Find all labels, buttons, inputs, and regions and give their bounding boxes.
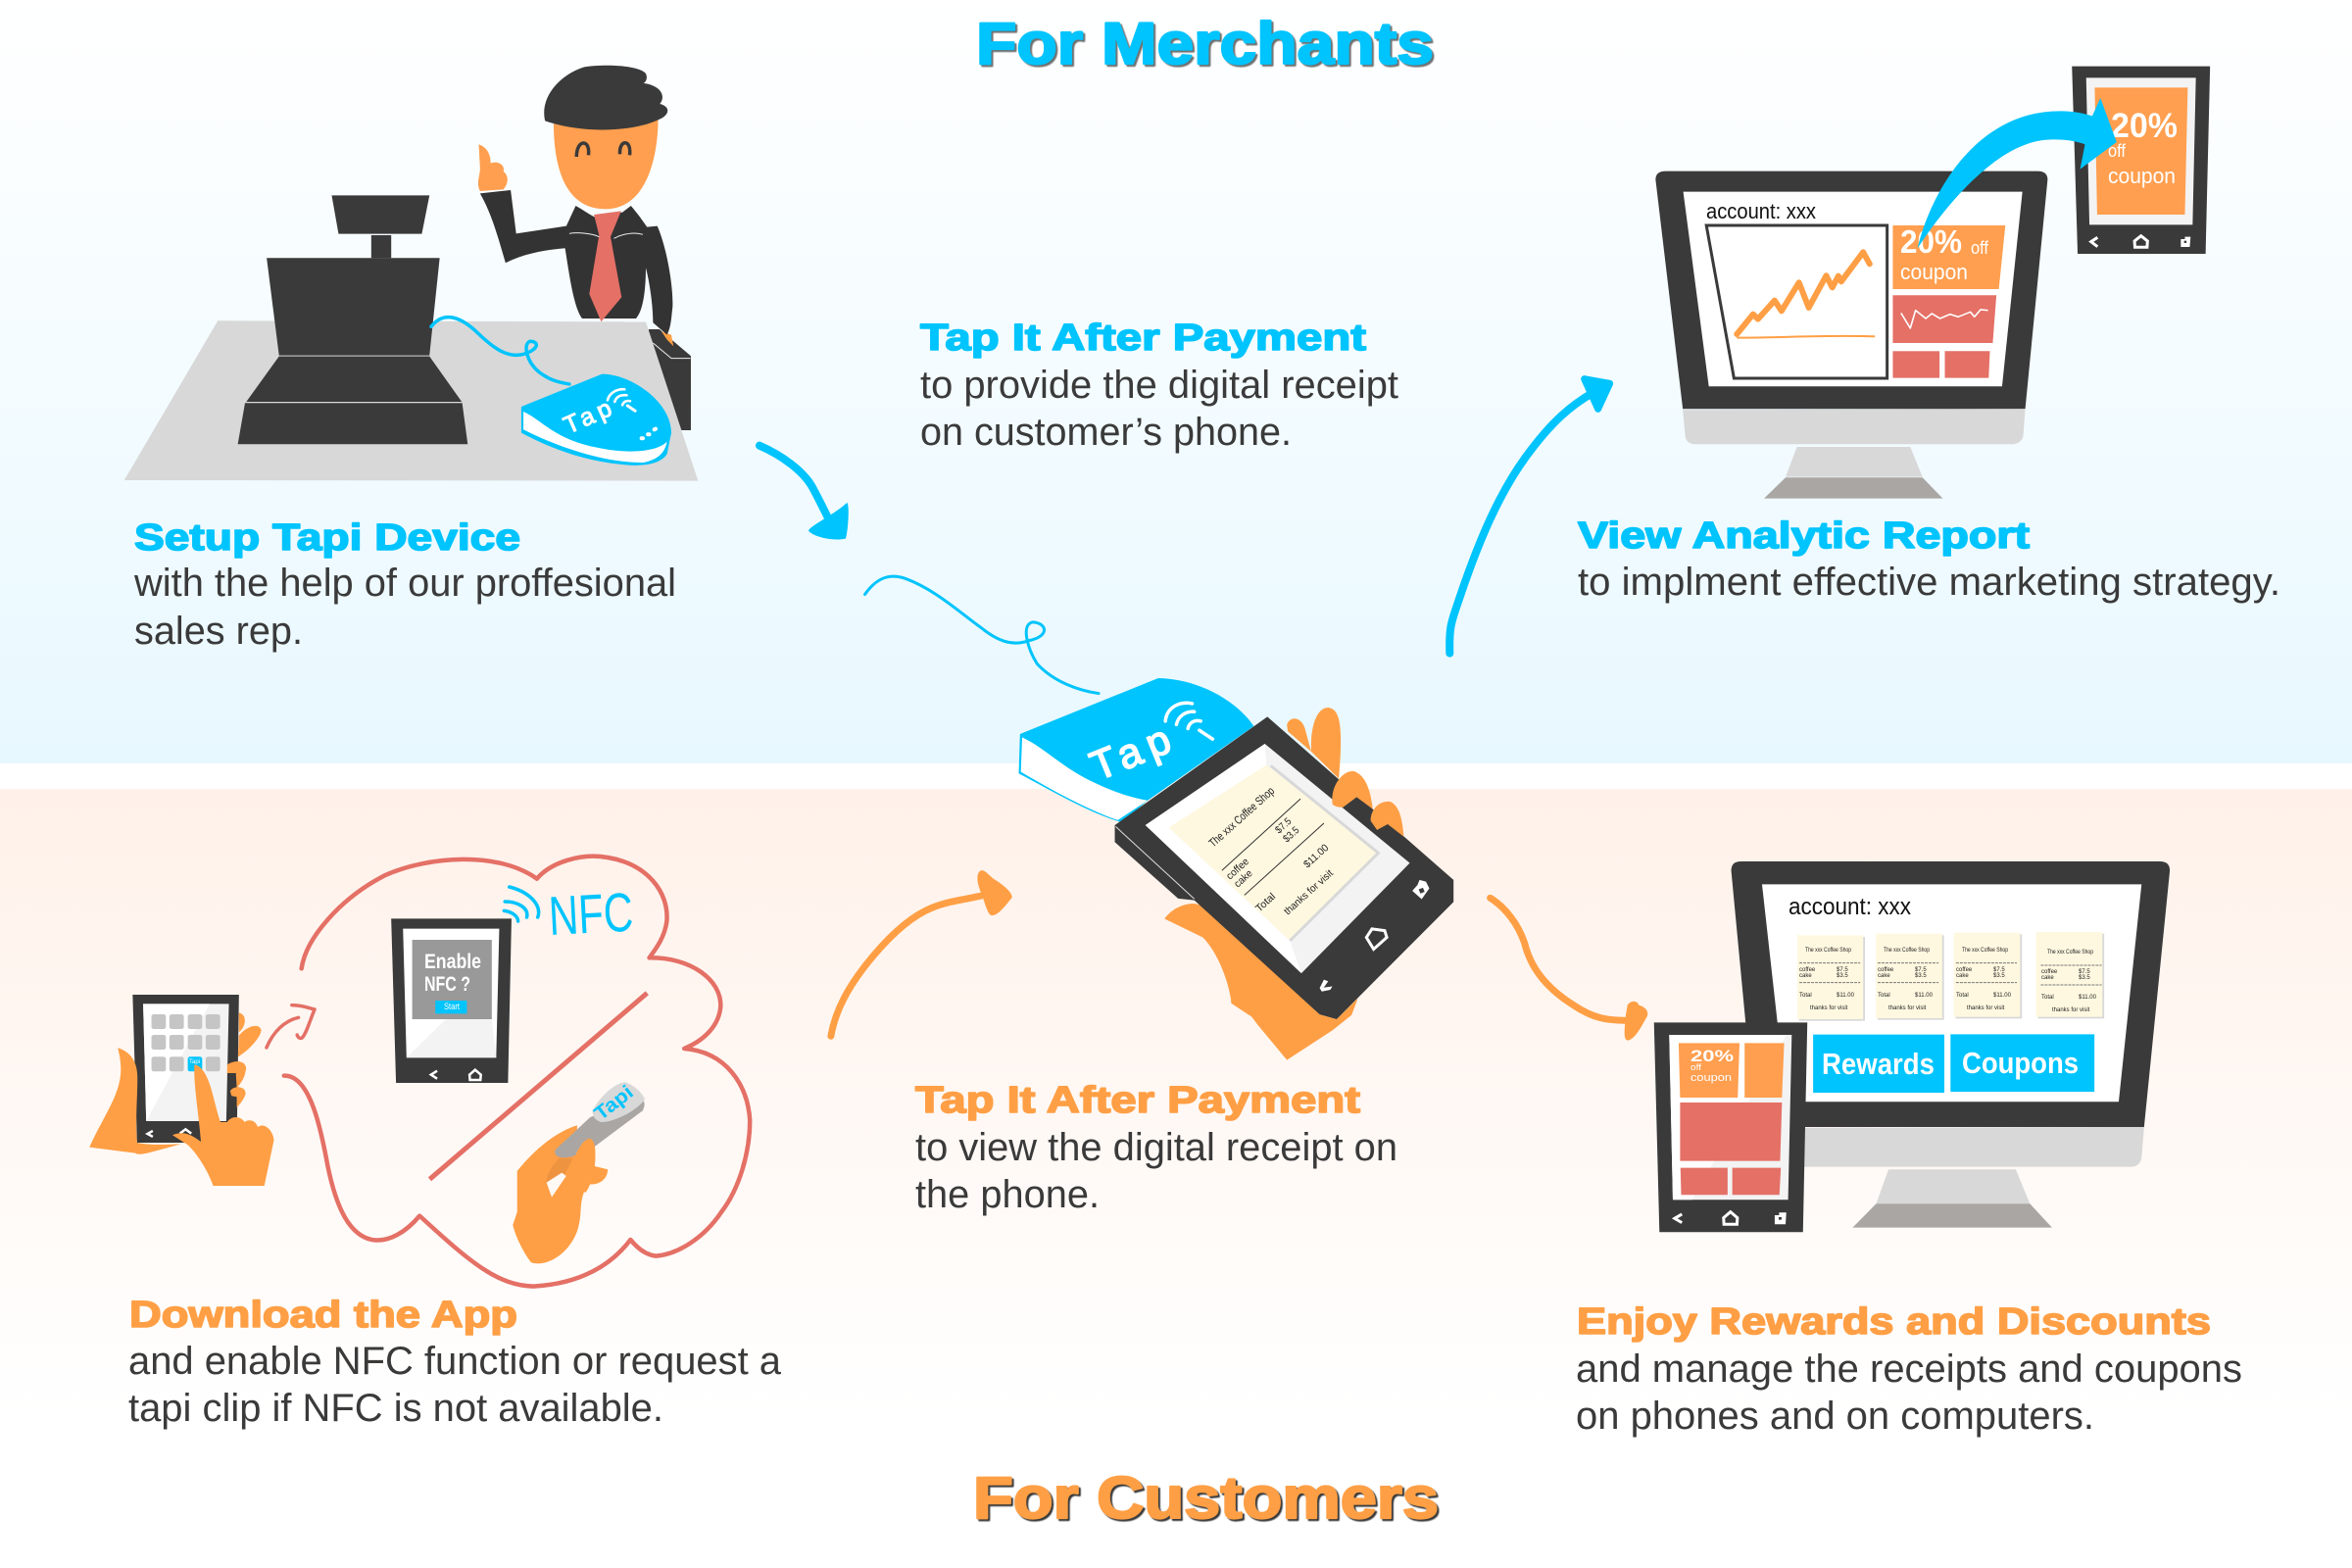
rewards monitor stand <box>1852 1169 2052 1228</box>
NFC phone prompt text: Start <box>444 1002 460 1012</box>
text block: Enjoy Rewards and Discounts: and manage the receipts and coupons <box>1576 1348 2242 1391</box>
phone screen <box>1146 744 1410 973</box>
text block: Tap It After Payment (merchant): on customer’s phone. <box>920 411 1292 454</box>
rewards monitor chin <box>1757 1127 2144 1167</box>
monitor coupon text <box>1900 223 1989 284</box>
Coupons label: Coupons <box>1962 1046 2079 1080</box>
rewards phone coupon text: 20% <box>1690 1047 1734 1065</box>
rewards monitor frame <box>1732 861 2170 1127</box>
center device cable <box>865 576 1099 694</box>
app icon label: Tapi <box>189 1059 200 1065</box>
text block: Download the App: Download the App <box>129 1295 517 1336</box>
receipt text <box>1206 784 1336 917</box>
receipt card text 1: The xxx Coffee Shop <box>1805 948 1852 954</box>
phone nav icons <box>2091 236 2190 247</box>
phone coupon text: coupon <box>2108 164 2176 188</box>
receipt card text 3 <box>1956 948 2012 1011</box>
NFC phone <box>391 918 512 1083</box>
NFC phone prompt text <box>424 951 481 1012</box>
hand holding tapi clip <box>513 1125 608 1263</box>
receipt card text 3: coffee <box>1956 967 1973 973</box>
receipt card text 2: Total <box>1878 993 1890 999</box>
app phone <box>132 995 239 1143</box>
divider slash <box>429 993 647 1179</box>
small red tiles <box>1892 351 1990 378</box>
thought cloud <box>284 857 750 1287</box>
text block: View Analytic Report: View Analytic Report <box>1578 515 2030 557</box>
receipt card text 4: $3.5 <box>2079 975 2090 981</box>
receipt card text 4: cake <box>2041 975 2054 981</box>
text block: Enjoy Rewards and Discounts <box>1576 1301 2242 1438</box>
receipt card text 2: thanks for visit <box>1888 1005 1927 1011</box>
receipt card text 2: The xxx Coffee Shop <box>1884 948 1931 954</box>
arrow into cloud <box>267 1005 315 1048</box>
text block: View Analytic Report <box>1578 515 2280 604</box>
device label: Tapi: Tapi <box>560 388 630 439</box>
receipt text: $3.5 <box>1281 824 1301 845</box>
monitor screen <box>1684 192 2023 386</box>
receipt card text 3: $3.5 <box>1993 973 2005 979</box>
receipt card text 1: Total <box>1799 993 1812 999</box>
background: merchants section <box>0 0 2352 763</box>
Coupons button <box>1950 1034 2094 1092</box>
illustration: center Tapi device and phone with receipt <box>865 576 1453 1060</box>
monitor stand <box>1764 447 1942 499</box>
title: For Merchants: For Merchants <box>976 11 1434 76</box>
center device body <box>1019 678 1253 822</box>
Rewards label: Rewards <box>1822 1047 1935 1081</box>
receipt card text 2: $3.5 <box>1915 973 1927 979</box>
receipt card text 3: $11.00 <box>1993 993 2012 999</box>
text block: Tap It After Payment (customer): the phone. <box>915 1173 1100 1216</box>
rewards phone coupon text: coupon <box>1690 1072 1732 1084</box>
receipt text: $11.00 <box>1301 842 1331 870</box>
receipt card text 1: $11.00 <box>1837 993 1855 999</box>
phone coupon text: off <box>2108 141 2127 161</box>
phone nav icons <box>1320 880 1429 992</box>
briefcase <box>648 329 691 430</box>
illustration: merchant at cash register with Tapi device <box>124 66 698 481</box>
receipt card text 1 <box>1799 948 1855 1011</box>
phone body <box>1115 716 1453 1019</box>
receipt card text 1: coffee <box>1799 967 1816 973</box>
receipt card text 2: $7.5 <box>1915 967 1927 973</box>
receipt card text 1: $7.5 <box>1837 967 1848 973</box>
receipt text: Total <box>1253 891 1278 914</box>
receipt card text 4 <box>2041 950 2097 1013</box>
text block: Tap It After Payment (customer): Tap It After Payment <box>915 1080 1360 1121</box>
NFC signal arcs <box>504 887 539 921</box>
monitor coupon text: off <box>1971 238 1989 258</box>
receipt card text 1: thanks for visit <box>1810 1005 1848 1011</box>
merchant figure <box>478 66 672 335</box>
tapi clip <box>555 1082 645 1157</box>
receipt card text 3: Total <box>1956 993 1969 999</box>
fingers behind app phone <box>238 1012 262 1056</box>
receipt card text 2: coffee <box>1878 967 1894 973</box>
monitor text: account: account: xxx <box>1706 199 1816 223</box>
thumb and palm over clip <box>547 1139 595 1198</box>
text block: Download the App: tapi clip if NFC is not available. <box>128 1387 663 1430</box>
receipt card text 3: The xxx Coffee Shop <box>1962 948 2009 954</box>
device cable <box>431 318 569 384</box>
receipt text: coffee <box>1224 856 1251 882</box>
Rewards button <box>1813 1035 1944 1093</box>
NFC phone prompt text: Enable <box>424 951 481 973</box>
monitor coupon text: 20% <box>1900 223 1962 260</box>
text block: Setup Tapi Device: sales rep. <box>134 610 303 653</box>
receipt card text 4: thanks for visit <box>2052 1007 2090 1013</box>
rewards monitor screen <box>1762 884 2141 1102</box>
monitor chin <box>1683 409 2026 444</box>
text block: Enjoy Rewards and Discounts: on phones and on computers. <box>1576 1395 2094 1438</box>
receipt card text 4: $7.5 <box>2079 969 2090 975</box>
receipt card text 4: Total <box>2041 995 2054 1001</box>
counter top <box>124 320 698 481</box>
receipt card text 3: cake <box>1956 973 1969 979</box>
receipt paper <box>1169 765 1378 941</box>
receipt card text 2: $11.00 <box>1915 993 1934 999</box>
text block: Tap It After Payment (customer): to view the digital receipt on <box>915 1126 1397 1169</box>
receipt cards <box>1797 932 2104 1021</box>
receipt card text 4: The xxx Coffee Shop <box>2047 950 2094 956</box>
red stats tile <box>1892 295 1996 343</box>
title: For Customers: For Customers <box>973 1465 1439 1531</box>
device wifi arcs, dash and dots <box>608 389 656 438</box>
hands on app phone <box>89 1048 274 1186</box>
monitor frame <box>1655 172 2047 409</box>
receipt card text 1: $3.5 <box>1837 973 1848 979</box>
arrow: download to tap (orange) <box>831 870 1012 1036</box>
rewards phone <box>1654 1022 1807 1232</box>
line chart <box>1706 225 1887 378</box>
receipt text: thanks for visit <box>1282 867 1336 917</box>
receipt text: cake <box>1232 867 1255 890</box>
text block: Download the App: and enable NFC function or request a <box>128 1340 782 1383</box>
receipt card text 3: $7.5 <box>1993 967 2005 973</box>
center device label: Tapi: Tapi <box>1084 707 1200 789</box>
hand holding phone <box>1164 904 1358 1060</box>
text block: Setup Tapi Device: with the help of our proffesional <box>133 562 676 605</box>
receipt text: $7.5 <box>1273 815 1294 836</box>
Tapi device body <box>521 374 671 466</box>
text block: Setup Tapi Device <box>133 517 676 653</box>
cash register <box>238 195 467 444</box>
illustration: analytics monitor and phone coupon <box>1655 67 2210 499</box>
text block: Enjoy Rewards and Discounts: Enjoy Rewards and Discounts <box>1577 1301 2211 1343</box>
text block: Tap It After Payment (merchant): to provide the digital receipt <box>920 364 1398 407</box>
text block: Setup Tapi Device: Setup Tapi Device <box>134 517 520 559</box>
NFC phone prompt text: NFC ? <box>424 973 470 996</box>
text block: Tap It After Payment (merchant) <box>920 318 1398 454</box>
arrow: setup to tap (blue) <box>760 446 849 540</box>
illustration: rewards monitor and phone <box>1654 861 2170 1232</box>
background: customers section <box>0 789 2352 1416</box>
phone coupon text <box>2108 107 2178 188</box>
receipt card text 2 <box>1878 948 1934 1011</box>
receipt card text 4: coffee <box>2041 969 2058 975</box>
arrow: coupon sent from monitor to phone <box>1918 98 2117 248</box>
receipt card text 3: thanks for visit <box>1967 1005 2005 1011</box>
NFC label: NFC <box>547 881 635 947</box>
text block: View Analytic Report: to implment effective marketing strategy. <box>1578 561 2280 604</box>
fingers in front of phone <box>1332 771 1403 837</box>
arrow: tap to rewards (orange) <box>1491 898 1647 1041</box>
rewards monitor text: account: account: xxx <box>1788 894 1911 920</box>
rewards phone coupon text: off <box>1690 1062 1702 1072</box>
text block: Download the App <box>128 1295 782 1430</box>
text block: Tap It After Payment (merchant): Tap It After Payment <box>920 318 1366 359</box>
arrow: tap to analytics (blue) <box>1449 379 1610 654</box>
phone coupon text: 20% <box>2111 107 2178 145</box>
receipt card text 4: $11.00 <box>2079 995 2097 1001</box>
clip label: Tapi: Tapi <box>591 1082 638 1125</box>
receipt text: The xxx Coffee Shop <box>1206 784 1277 850</box>
phone frame and screen <box>2072 67 2210 254</box>
rewards phone coupon text <box>1690 1047 1734 1084</box>
monitor coupon text: coupon <box>1900 260 1968 284</box>
text block: Tap It After Payment (customer) <box>915 1080 1397 1216</box>
coupon tile <box>1892 225 2005 289</box>
center device wifi arcs and dash <box>1165 703 1212 739</box>
receipt card text 2: cake <box>1878 973 1890 979</box>
illustration: phone app and NFC thought cloud <box>89 857 750 1287</box>
receipt card text 1: cake <box>1799 973 1812 979</box>
fingers behind phone <box>1287 708 1341 778</box>
